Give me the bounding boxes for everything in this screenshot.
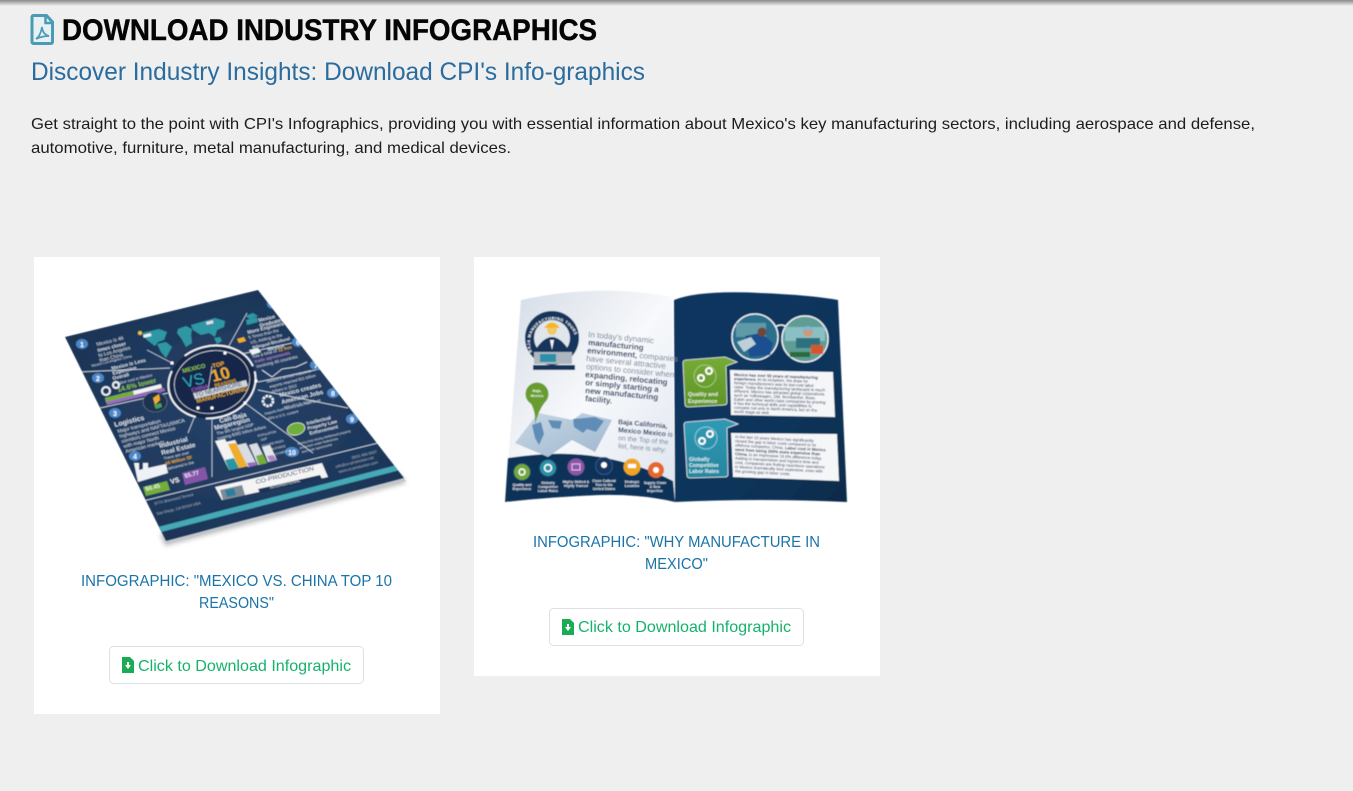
section text: Mexico's annual industrial (266, 368, 312, 384)
price tags: $5.77 (184, 470, 201, 480)
download button: Click to Download Infographic (578, 619, 791, 636)
map icon with pin: Mexico (531, 394, 544, 398)
brochure illustration: Mexico vs China: MANUFACTURING (196, 386, 249, 405)
brochure illustration: Mexico vs China: CHINA (191, 384, 209, 394)
section text: delivered in the (167, 460, 195, 471)
text box: labor: in Mexico dramatically less expensive, even with (735, 464, 824, 474)
section text: Property Law (307, 419, 338, 432)
section text: More Engineers (247, 321, 285, 336)
Baja text: list, here is why: (618, 443, 667, 454)
card background (34, 257, 440, 714)
section text: to Los Angeles (98, 345, 132, 359)
callout: globally competitive: Competitive (689, 463, 719, 469)
subtitle: Discover Industry Insights: Download CPI's Info-graphics (31, 58, 645, 86)
section text: Bilingual-Bicultural (252, 336, 291, 350)
left page intro text: new manufacturing (585, 386, 659, 402)
left page intro text: environment, companies (587, 346, 678, 364)
section text: dollars in 2012 (271, 383, 298, 394)
section text: Graduates (259, 317, 285, 329)
panel: card Mexico vs China (34, 257, 440, 714)
brochure illustration: Why Manufacture: Labor Rates (538, 489, 558, 493)
intro paragraph: automotive, furniture, metal manufacturing, and medical devices. (31, 140, 511, 157)
callout: quality and experience: Quality and (688, 392, 718, 398)
numbered badges (76, 299, 358, 461)
card caption: INFOGRAPHIC: "WHY MANUFACTURE IN (533, 534, 820, 551)
section text: Major transportation (117, 419, 162, 435)
intro paragraph: Get straight to the point with CPI's Infographics, providing you with essential information about Mexico's key manufacturing sectors, including aerospace and defense, (31, 116, 1255, 133)
brochure illustration: Why Manufacture: Experience (513, 487, 531, 491)
price tags (143, 467, 208, 496)
factory icon (134, 463, 168, 482)
contact text: www.co-production.com (338, 460, 378, 474)
contact text: San Diego, CA 92154 USA (156, 501, 202, 516)
line chart (262, 362, 307, 377)
Baja text: Mexico Mexico is (618, 427, 674, 439)
brochure illustration: Mexico vs China: 6 (296, 340, 300, 347)
title: DOWNLOAD INDUSTRY INFOGRAPHICS (62, 14, 597, 47)
section text: Mexico has strong intellectual property (297, 429, 352, 446)
card background (474, 257, 880, 676)
contact text: info@co-production.net (335, 455, 375, 469)
brochure illustration: Mexico vs China: 8 (331, 391, 335, 398)
brochure illustration: Why Manufacture: Ties to the (595, 483, 613, 487)
text box: quality: foreign manufacturers was its low-cost labor (734, 380, 815, 388)
section text: Mexico (258, 314, 276, 324)
brochure illustration: Why Manufacture: Globally (541, 481, 555, 485)
brochure illustration: Mexico vs China: VS (181, 371, 207, 392)
brochure illustration: Mexico vs China: 9 (350, 417, 354, 424)
section text: Labor cost in Mexico (116, 372, 154, 386)
text box: labor: In the last 10 years Mexico has significantly (735, 434, 815, 443)
left page intro text: or simply starting a (585, 378, 660, 394)
section text: Logistics (113, 415, 145, 429)
section text: SQUARE MILES (261, 439, 284, 448)
icon: file download (122, 657, 134, 673)
price tags: $0.45 (145, 483, 162, 493)
section text: has a total of 12 free (252, 344, 293, 359)
section text: US, Adding to the (250, 332, 284, 345)
brochure illustration: Why Manufacture: Expertise (647, 489, 663, 493)
brochure illustration: Why Manufacture: Competitive (538, 485, 558, 489)
section text: 14.6% lower (116, 378, 158, 394)
text box: quality: world stage as well. (734, 409, 770, 415)
intro paragraph (31, 116, 1255, 157)
section text: Mexico Los Angeles China (91, 354, 132, 368)
brochure illustration: Mexico vs China: 1 (80, 342, 84, 349)
brochure illustration: Why Manufacture: Location (625, 484, 639, 488)
section text: Enforcement (309, 424, 339, 437)
seal icon (286, 421, 306, 437)
brochure illustration: Why Manufacture: United States (593, 487, 615, 491)
photo circles (732, 314, 828, 362)
brochure illustration: Why Manufacture: & New (650, 485, 661, 489)
section text: Cali-Baja (218, 411, 248, 425)
callout: quality and experience (683, 357, 737, 407)
callout: globally competitive: Labor Rates (689, 469, 719, 475)
section text: with major North (123, 435, 160, 450)
brochure illustration: Mexico vs China: TOP (212, 361, 225, 370)
section text: highways and NAFTA/USMCA (119, 418, 186, 440)
panel: card Why Manufacture in Mexico (474, 257, 880, 676)
right page (674, 292, 847, 502)
brochure illustration: Mexico vs China: TO NEARSHORE (195, 382, 243, 399)
Baja text: on the Top of the (618, 435, 669, 446)
brochure illustration: Mexico vs China (65, 290, 406, 546)
CPI logo: INTERNATIONAL (269, 478, 302, 490)
section text: Mexico is 46 (96, 335, 125, 348)
callout: globally competitive (684, 419, 738, 478)
brochure illustration: Mexico vs China: 7 (314, 363, 318, 370)
text box: quality: it has the technical skills and capabilities to (734, 401, 813, 408)
icon: PDF file (32, 16, 52, 44)
brochure illustration: Why Manufacture (504, 290, 848, 503)
center emblem (170, 346, 254, 418)
text box: labor: the growing gap in labor costs. (735, 468, 791, 476)
left page intro text: facility. (585, 394, 613, 406)
map icon with pin (515, 382, 612, 457)
text box: labor: cost, companies are finding nearshore operations (735, 460, 825, 469)
section text: Real Estate (160, 442, 197, 457)
brochure illustration: Mexico vs China: 4 (133, 454, 137, 461)
text box: labor (731, 433, 839, 481)
brochure illustration: Why Manufacture: Supply Chain (644, 481, 666, 485)
section text: GDP (260, 437, 268, 442)
Baja text (618, 419, 674, 454)
brochure illustration: Why Manufacture: Strategic (625, 480, 640, 484)
section text: than China (121, 387, 146, 399)
text box: labor: went from being 200% more expensive than (734, 447, 821, 456)
section text: Mexico creates (279, 383, 323, 399)
card caption (533, 534, 820, 573)
band icons (514, 458, 664, 480)
gear icon (263, 396, 273, 406)
brochure illustration: Why Manufacture: Highly Skilled & (563, 480, 590, 484)
header block (31, 14, 1255, 157)
CPI logo (215, 463, 328, 500)
card caption (81, 573, 392, 612)
left page intro text: expanding, relocating (585, 370, 668, 387)
section text: LABOR FORCE (264, 444, 286, 453)
progress bars (105, 384, 162, 402)
section text: Overall (112, 372, 131, 382)
top shadow bar (0, 0, 1353, 6)
section text: Industrial (158, 436, 189, 450)
text box: quality (730, 370, 835, 417)
brochure illustration: Mexico vs China: REASONS (214, 378, 237, 388)
section text: The 6th largest GDP (216, 422, 255, 436)
text box: quality: Eaton and other world class companies by proving (734, 397, 826, 405)
left page (505, 291, 675, 502)
text box: quality: different. Mexico has attracted global corporations (734, 388, 825, 397)
brochure illustration: Mexico vs China: 3 (113, 411, 117, 418)
section text: Megaregion (213, 416, 251, 432)
left page intro text: have several attractive (586, 354, 667, 371)
section text: Imports from Mexico and more trade (264, 398, 321, 416)
CPI logo: CO-PRODUCTION (255, 466, 315, 486)
gears icon (102, 382, 119, 395)
section text: exports reached $11 billion (269, 373, 316, 389)
text box: quality: rates. Today the manufacturing landscape is much (734, 384, 826, 393)
section text: 40% is U.S. content (267, 410, 299, 421)
section text: protection under federal law (299, 437, 339, 450)
world map (142, 318, 225, 358)
price tags: VS (169, 477, 181, 486)
graduation icon (245, 313, 258, 325)
brochure illustration: Why Manufacture: Quality and (512, 483, 532, 487)
brochure illustration: Mexico vs China: 5 (271, 302, 275, 309)
brochure illustration: Mexico vs China: 10 (288, 450, 296, 457)
brochure illustration: Mexico vs China: MEXICO (182, 363, 207, 375)
section text: trade agreements (254, 350, 291, 364)
text box: quality: Mexico has over 50 years of manufacturing (734, 372, 819, 380)
section text: Mexico (267, 343, 285, 353)
left page intro text: options to consider when (586, 362, 675, 379)
contact text: (855) 480-5637 (351, 450, 377, 460)
text box: labor: offshore competitor, China. Labor cost in Mexico (735, 443, 826, 452)
section text: corridors connect Mexico (121, 426, 177, 445)
brochure illustration: Mexico vs China: 2 (96, 376, 100, 383)
section text: topping $392 billion dollars (217, 424, 267, 441)
download button: Click to Download Infographic (138, 658, 351, 675)
text box: labor: Adding in transportation and logistics time and (735, 456, 820, 465)
section text: 5 Times than the (248, 328, 280, 340)
left page intro text: In today's dynamic (588, 330, 654, 345)
section text (91, 314, 352, 471)
text box: labor: closed the gap in labor costs compared to its (735, 438, 816, 448)
callout: globally competitive: Globally (689, 457, 710, 463)
bar chart (215, 439, 277, 470)
section text: There are over (163, 450, 190, 461)
text box: quality: compete not only in North America, but on the (734, 405, 818, 413)
section text: POPULATION (257, 430, 277, 438)
section text: and trade agreements (301, 443, 333, 454)
divider lines (78, 313, 378, 501)
download button (110, 646, 364, 684)
callout: quality and experience: Experience (688, 399, 717, 405)
section text: Expensive (112, 365, 138, 377)
tours badge: BAJA MANUFACTURING TOURS (526, 316, 578, 354)
text box: labor: China, to an impressive 19.6% difference today. (735, 451, 822, 461)
brochure illustration: Why Manufacture: Highly Trained (564, 484, 588, 488)
icon: file download (562, 619, 574, 635)
teal stripe (158, 465, 400, 532)
section text: Intellectual (306, 415, 332, 427)
text box: quality: such as Volkswagen, GM, Bombardier, Bose, (734, 393, 816, 400)
handshake icon (249, 348, 261, 355)
section text: American Jobs (281, 390, 325, 406)
download button (550, 608, 804, 646)
contact text (154, 450, 378, 516)
globe (143, 392, 167, 412)
map icon with pin: Baja, (532, 389, 542, 393)
brochure illustration: Mexico vs China: 10 (208, 363, 233, 386)
section text: EMPLOYMENT (267, 449, 289, 458)
tours badge (524, 310, 580, 371)
Baja text: Baja California, (618, 419, 668, 430)
left page bottom band (505, 454, 675, 502)
left page intro text: manufacturing (588, 338, 644, 352)
section text: American markets (125, 439, 166, 455)
section text: Mexico is Less (111, 358, 147, 372)
text box: quality: experience. At its inception, the draw for (734, 376, 809, 384)
card caption: MEXICO" (645, 556, 708, 573)
section text: involving 46 countries (256, 354, 299, 369)
section text: 60 Million SF (165, 455, 193, 466)
section text: than China (99, 352, 124, 364)
card caption: INFOGRAPHIC: "MEXICO VS. CHINA TOP 10 (81, 573, 392, 590)
brochure illustration: Why Manufacture: Close Cultural (592, 479, 616, 483)
left page intro text (585, 330, 678, 406)
section text: 40% of U.S. imports (283, 398, 315, 410)
section text: times closer (97, 341, 127, 354)
contact text: 8774 Sherwood Terrace (154, 492, 194, 506)
card caption: REASONS" (199, 595, 274, 612)
